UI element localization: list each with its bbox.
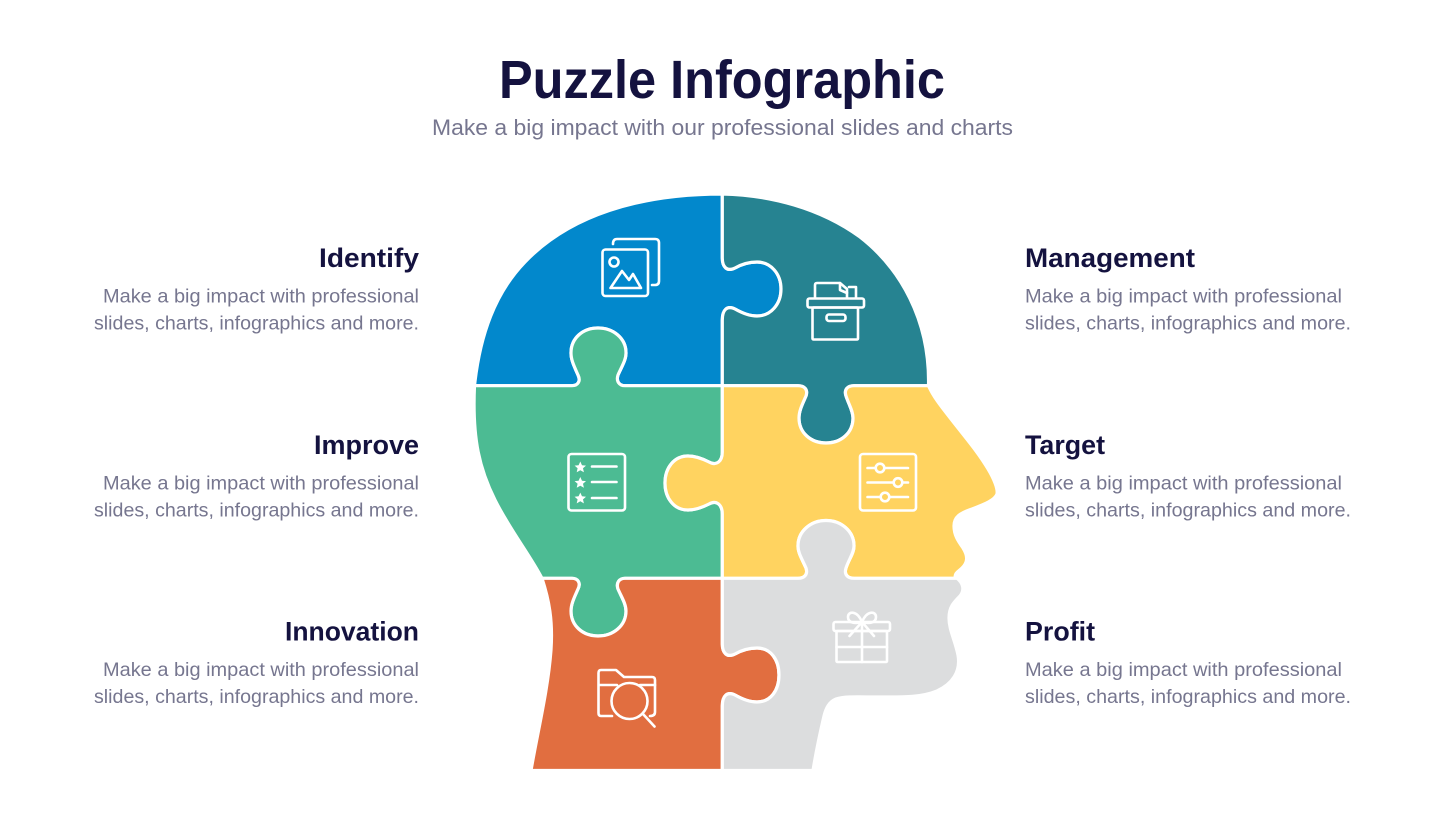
right text: Management: Make a big impact with professional [1025, 286, 1342, 308]
icon: pictures [602, 239, 659, 296]
left text: Improve: slides, charts, infographics and more. [94, 500, 419, 522]
left text: Identify: slides, charts, infographics and more. [94, 312, 419, 334]
icon: starred list [568, 454, 625, 510]
right text: Management [1025, 243, 1351, 334]
puzzle piece: teal [722, 194, 929, 443]
right text: Target: Target [1025, 430, 1105, 460]
left text: Innovation: Make a big impact with professional [103, 659, 419, 681]
right text: Target: slides, charts, infographics and more. [1025, 500, 1351, 522]
right text: Profit [1025, 616, 1351, 708]
right text: Management: slides, charts, infographics and more. [1025, 312, 1351, 334]
left text: Identify: Make a big impact with professional [103, 286, 419, 308]
left text: Identify [94, 243, 419, 334]
puzzle piece: gray [722, 520, 963, 770]
puzzle piece: yellow [665, 386, 997, 578]
title: Puzzle Infographic [499, 50, 945, 110]
right text: Target: Make a big impact with professional [1025, 472, 1342, 494]
icon: gift box [834, 613, 890, 662]
left text: Identify: Identify [319, 243, 419, 273]
puzzle piece: orange [531, 578, 779, 770]
left text: Improve [94, 430, 419, 522]
left text: Innovation [94, 616, 419, 708]
right text: Profit: slides, charts, infographics and more. [1025, 686, 1351, 708]
right text: Target [1025, 430, 1351, 522]
icon: sliders [860, 454, 916, 510]
puzzle piece: green [474, 328, 722, 636]
icon: folder search [598, 670, 655, 726]
left text: Innovation: slides, charts, infographics and more. [94, 686, 419, 708]
subtitle: Make a big impact with our professional slides and charts [432, 115, 1013, 140]
icon: archive box [808, 283, 864, 340]
left text: Improve: Improve [314, 430, 419, 460]
left text: Innovation: Innovation [285, 616, 419, 646]
puzzle piece: blue [474, 194, 781, 386]
left text: Improve: Make a big impact with professional [103, 472, 419, 494]
right text: Management: Management [1025, 243, 1195, 273]
puzzle head [474, 194, 997, 770]
right text: Profit: Profit [1025, 616, 1095, 646]
right text: Profit: Make a big impact with professional [1025, 659, 1342, 681]
